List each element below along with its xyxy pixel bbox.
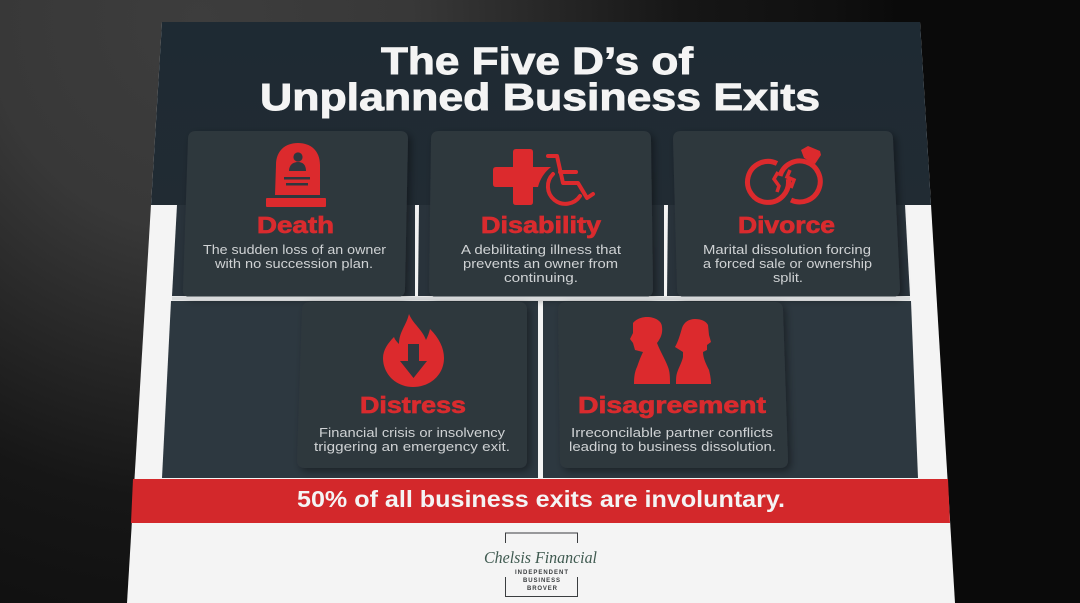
description: triggering an emergency exit. xyxy=(314,439,510,454)
description xyxy=(569,425,776,454)
icon: tombstone xyxy=(266,143,326,207)
description xyxy=(203,242,387,271)
card xyxy=(429,131,653,297)
poster sheet xyxy=(127,22,955,603)
header band xyxy=(151,22,931,205)
description xyxy=(703,242,872,285)
description xyxy=(314,425,510,454)
description xyxy=(461,242,621,285)
description: with no succession plan. xyxy=(214,256,373,271)
description: prevents an owner from xyxy=(463,256,618,271)
card xyxy=(673,131,900,297)
icon: two silhouettes back to back xyxy=(630,317,711,384)
card xyxy=(183,131,408,297)
title: The Five D’s of xyxy=(381,41,693,83)
logo script: Chelsis Financial xyxy=(484,548,597,567)
card xyxy=(297,302,527,468)
icon: medical cross and wheelchair xyxy=(493,149,593,205)
description: leading to business dissolution. xyxy=(569,439,776,454)
description: split. xyxy=(773,270,803,285)
panel: divorce xyxy=(673,131,900,297)
description: The sudden loss of an owner xyxy=(203,242,387,257)
white strip between rows xyxy=(172,296,910,300)
heading: Disagreement xyxy=(578,392,766,418)
heading: Disability xyxy=(481,212,601,238)
panel: disability xyxy=(429,131,653,297)
panel: death xyxy=(183,131,408,297)
heading: Death xyxy=(257,212,334,238)
logo tagline xyxy=(515,570,568,592)
logo tagline: BROVER xyxy=(527,586,558,592)
description: Marital dissolution forcing xyxy=(703,242,871,257)
logo tagline: INDEPENDENT xyxy=(515,570,568,576)
description: Irreconcilable partner conflicts xyxy=(571,425,773,440)
description: continuing. xyxy=(504,270,578,285)
dark background panels xyxy=(162,205,918,478)
logo frame xyxy=(506,533,578,596)
heading: Divorce xyxy=(738,212,835,238)
red statistic banner xyxy=(131,479,950,523)
description: A debilitating illness that xyxy=(461,242,621,257)
description: a forced sale or ownership xyxy=(703,256,872,271)
title: Unplanned Business Exits xyxy=(260,77,820,119)
panel: distress xyxy=(297,302,527,468)
logo tagline: BUSINESS xyxy=(523,578,560,584)
panel: disagreement xyxy=(558,302,788,468)
logo: Chelsis Financial xyxy=(484,533,597,596)
card xyxy=(558,302,788,468)
icon: broken rings xyxy=(748,146,821,202)
icon: flame with down arrow xyxy=(383,314,444,387)
description: Financial crisis or insolvency xyxy=(319,425,505,440)
banner text: 50% of all business exits are involuntary. xyxy=(297,486,785,512)
heading: Distress xyxy=(360,392,466,418)
title xyxy=(260,41,820,119)
